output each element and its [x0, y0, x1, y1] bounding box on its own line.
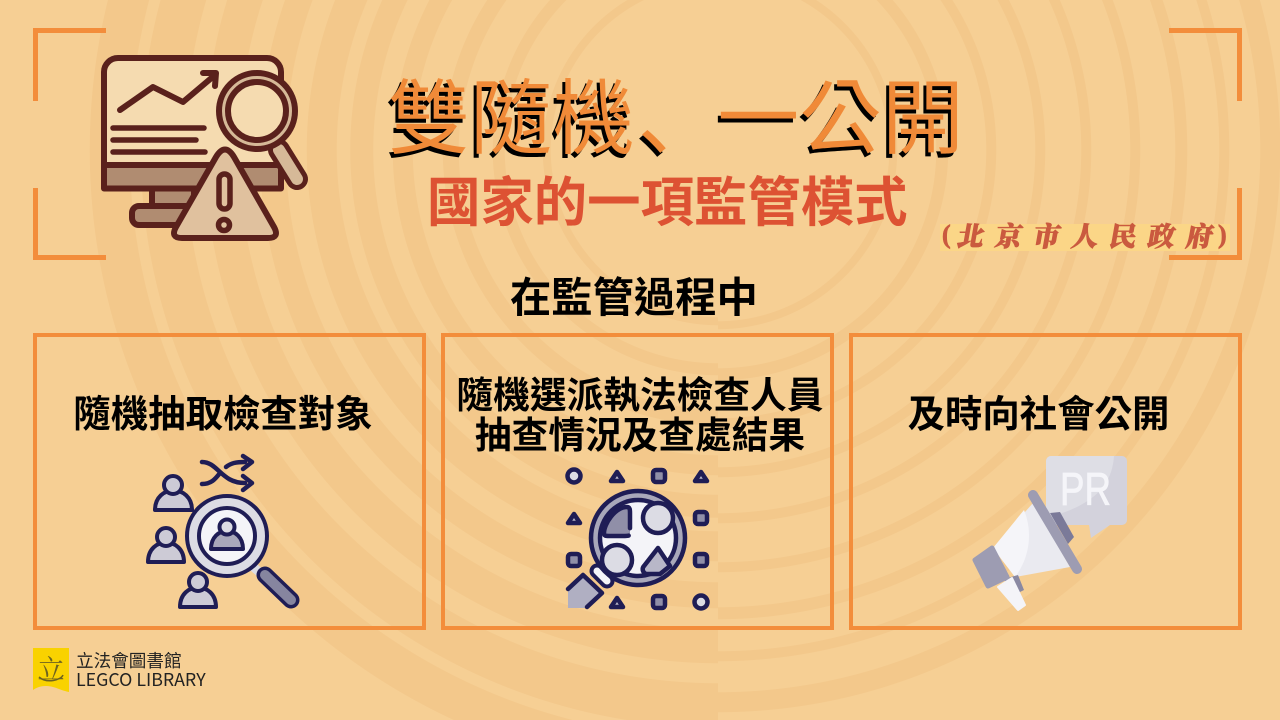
source note: Beijing government: ) [1218, 220, 1227, 249]
icon: megaphone with PR speech bubble [972, 456, 1127, 611]
speech bubble with PR: PR [1060, 463, 1111, 515]
speech bubble with PR [1046, 456, 1127, 538]
panel heading: inspectors [457, 375, 823, 456]
panel: public disclosure [849, 333, 1242, 630]
logo mark [33, 648, 69, 692]
panel heading: inspectors: 抽查情況及查處結果 [475, 415, 805, 456]
section heading: 在監管過程中 [510, 275, 758, 321]
icon: people and magnifier with shuffle arrows [146, 454, 300, 609]
logo: LegCo Library [33, 648, 206, 692]
logo text: 立法會圖書館 [76, 651, 182, 671]
logo mark: 立 [38, 655, 64, 685]
logo text [76, 651, 206, 692]
title: 、 [613, 99, 695, 190]
source note: Beijing government: ( [942, 220, 951, 249]
panel heading: disclosure: 及時向社會公開 [908, 393, 1169, 435]
source note: Beijing government: 北京市人民政府 [954, 222, 1227, 252]
panel heading: inspectors: 隨機選派執法檢查人員 [457, 375, 823, 416]
icon: monitor with magnifier and warning triangle [101, 55, 308, 241]
panel: random inspectors [441, 333, 834, 630]
logo text: LEGCO LIBRARY [76, 666, 206, 692]
subtitle: 國家的一項監管模式 [427, 174, 908, 233]
panel: random inspection targets [33, 333, 426, 630]
title: 雙隨機 一公開 [388, 74, 964, 165]
icon: magnifier over shapes grid [565, 467, 710, 611]
panel heading: targets: 隨機抽取檢查對象 [73, 393, 373, 435]
